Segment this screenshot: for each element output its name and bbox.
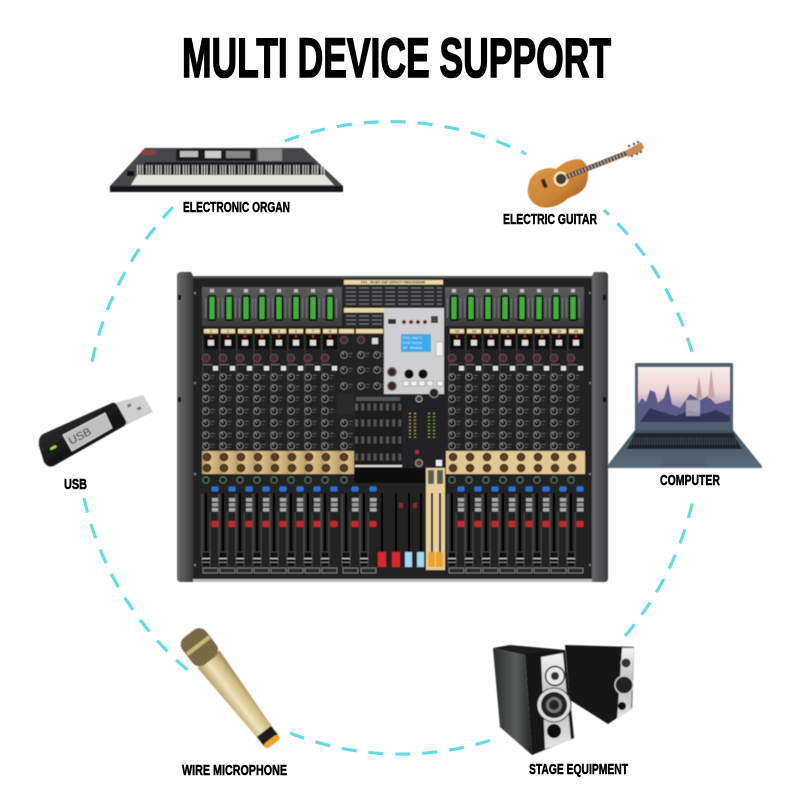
channel numbers: 5 <box>278 330 280 334</box>
channel numbers: 1 <box>210 330 212 334</box>
rack ear notches <box>178 295 606 402</box>
channel numbers: 6 <box>295 330 297 334</box>
gold jack strip right <box>446 451 585 474</box>
channel numbers: 17 <box>523 330 527 334</box>
channel numbers: 18 <box>540 330 544 334</box>
device: guitar <box>528 141 644 208</box>
LCD display: BT Ready <box>403 346 423 351</box>
LCD display: FX1:Hall <box>403 336 423 341</box>
screws <box>194 292 591 566</box>
channel numbers: 15 <box>489 330 493 334</box>
device: laptop computer <box>607 363 762 468</box>
LCD display <box>401 334 431 352</box>
channel numbers: 2 <box>227 330 229 334</box>
tan master strip <box>426 468 445 570</box>
device: USB stick <box>39 395 153 467</box>
master section <box>378 468 445 570</box>
channel numbers: 13 <box>455 330 459 334</box>
back speaker <box>565 645 634 724</box>
channel numbers: 14 <box>472 330 476 334</box>
stereo channels 9-12 <box>337 329 386 573</box>
label: electronic organ: ELECTRONIC ORGAN <box>183 200 290 216</box>
meter panel right <box>445 287 584 326</box>
channel numbers: 3 <box>244 330 246 334</box>
effects table: FX1 - 99 BIT DSP EFFECT PROCESSOR <box>361 281 426 285</box>
channel numbers: 8 <box>329 330 331 334</box>
DSP / media player panel <box>384 308 444 394</box>
graphic equaliser <box>355 397 402 468</box>
rack ear left <box>177 272 193 582</box>
device: electronic organ <box>110 148 343 192</box>
device: USB stick: USB <box>67 426 94 448</box>
audio mixer <box>177 272 608 582</box>
mixer chassis <box>190 276 595 581</box>
level meters <box>403 388 445 468</box>
channel numbers: 7 <box>312 330 314 334</box>
device: stage speakers <box>493 645 634 755</box>
meter panel left <box>202 287 342 326</box>
channel numbers <box>210 330 578 334</box>
dashed connection ring <box>84 122 693 754</box>
label: electric guitar: ELECTRIC GUITAR <box>503 212 597 228</box>
rack ear right <box>592 272 608 582</box>
channel meters <box>205 289 580 321</box>
LCD display: FX2:Echo <box>403 341 423 346</box>
front speaker <box>493 645 574 755</box>
channel numbers: 20 <box>574 330 578 334</box>
gold jack strip left <box>202 451 354 474</box>
channel strips left <box>201 329 338 573</box>
blank group panel <box>354 468 425 483</box>
label: stage equipment: STAGE EQUIPMENT <box>529 762 628 778</box>
channel numbers: 16 <box>506 330 510 334</box>
channel numbers: 4 <box>261 330 263 334</box>
device: microphone <box>177 625 286 753</box>
effects table <box>344 280 443 327</box>
channel numbers: 19 <box>557 330 561 334</box>
label: USB: USB <box>64 477 87 493</box>
channel strips right <box>447 329 584 573</box>
label: wire microphone: WIRE MICROPHONE <box>182 763 287 779</box>
label: computer: COMPUTER <box>660 473 720 489</box>
